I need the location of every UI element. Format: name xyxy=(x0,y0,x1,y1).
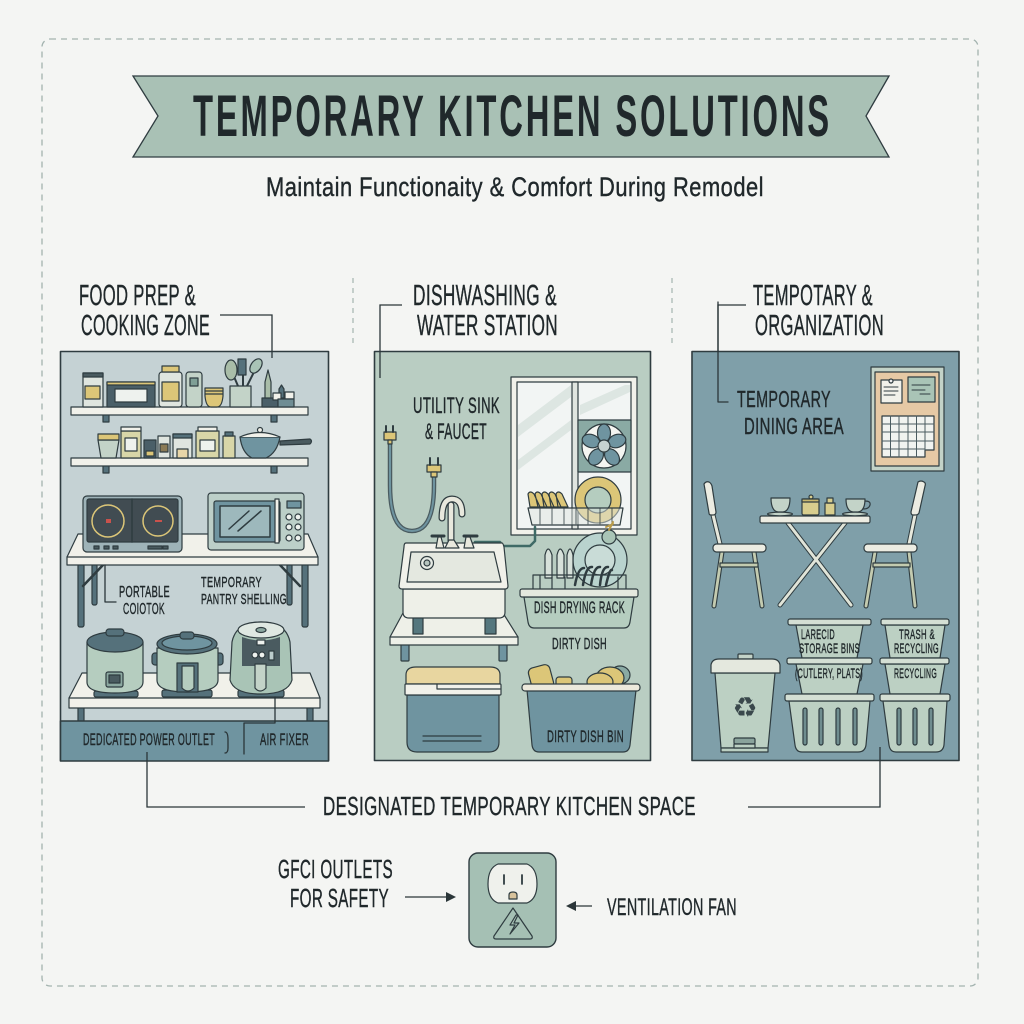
trash and recycling bins stack: TRASH & xyxy=(899,626,935,642)
corkboard with notes and calendar xyxy=(871,367,944,471)
bottom band: dedicated power outlet and air fryer: AIR FIXER xyxy=(260,730,309,749)
window rack with plates xyxy=(528,477,623,525)
label: temporary pantry shelling: PANTRY SHELLING xyxy=(201,591,287,608)
label: gfci outlets for safety: FOR SAFETY xyxy=(290,883,389,913)
connector: food prep heading xyxy=(220,315,272,358)
connector: dishwashing heading xyxy=(380,305,402,378)
label: temporary pantry shelling xyxy=(201,574,287,608)
heading: food prep: COOKING ZONE xyxy=(81,310,210,342)
heading: food prep: FOOD PREP & xyxy=(79,280,196,312)
arrow to outlet xyxy=(405,892,456,902)
storage bins stack: STORAGE BINS xyxy=(799,640,860,656)
heading: organization xyxy=(753,280,884,342)
trash and recycling bins stack xyxy=(880,619,950,752)
drain tube xyxy=(475,527,535,546)
panel: temporary dining and organization xyxy=(692,302,959,760)
callout: portable cooktop xyxy=(105,565,116,602)
subtitle: Maintain Functionaity & Comfort During Remodel xyxy=(266,172,764,202)
dish drying rack xyxy=(520,522,638,628)
portable cooktop xyxy=(83,496,182,552)
folding dining table xyxy=(760,516,870,605)
label: portable cooktop xyxy=(119,584,170,618)
heading: organization: TEMPOTARY & xyxy=(753,280,873,312)
cooler xyxy=(405,667,501,752)
utility sink with faucet xyxy=(390,499,518,661)
rice cooker xyxy=(87,629,143,697)
water hose with plugs xyxy=(384,426,441,531)
connector: organization heading top xyxy=(718,305,746,352)
trash and recycling bins stack: RECYCLING xyxy=(894,640,939,656)
shelf 1 with items xyxy=(71,357,308,422)
label: utility sink and faucet: & FAUCET xyxy=(425,419,487,444)
title banner xyxy=(133,76,889,157)
heading: dishwashing xyxy=(413,280,558,342)
label: gfci outlets for safety xyxy=(278,854,393,913)
label: portable cooktop: COIOTOK xyxy=(123,601,165,618)
right chair xyxy=(864,481,925,606)
label: designated temporary kitchen space: DESIGNATED TEMPORARY KITCHEN SPACE xyxy=(323,791,696,821)
label: portable cooktop: PORTABLE xyxy=(119,584,170,601)
label: ventilation fan: VENTILATION FAN xyxy=(607,894,737,921)
label: temporary pantry shelling: TEMPORARY xyxy=(201,574,262,591)
arrow from ventilation fan label xyxy=(566,901,592,911)
window with ventilation fan xyxy=(511,377,637,535)
bottom band: dedicated power outlet and air fryer xyxy=(60,697,328,761)
icon: gfci outlet xyxy=(469,853,556,947)
left chair xyxy=(704,482,766,606)
label: dirty dish: DIRTY DISH xyxy=(552,636,607,653)
bottom band: dedicated power outlet and air fryer: DEDICATED POWER OUTLET xyxy=(83,730,215,749)
panel: dishwashing and water station xyxy=(374,352,650,760)
heading: food prep xyxy=(79,280,210,342)
trash and recycling bins stack: RECYCLING xyxy=(894,665,937,681)
lower table xyxy=(69,673,320,722)
label: utility sink and faucet xyxy=(413,393,500,444)
heading: organization: ORGANIZATION xyxy=(755,310,884,342)
shelf 2 with items xyxy=(71,427,312,473)
dirty dish bin xyxy=(522,664,640,752)
dirty dish bin: DIRTY DISH BIN xyxy=(547,727,624,746)
callout: dining area xyxy=(718,302,728,402)
storage bins stack: (CUTLERY, PLATS) xyxy=(795,665,863,681)
slow cooker xyxy=(152,632,223,697)
microwave xyxy=(208,493,304,550)
trash can with recycling symbol: ♻ xyxy=(732,691,758,724)
label: gfci outlets for safety: GFCI OUTLETS xyxy=(278,854,393,884)
panel: food prep and cooking zone xyxy=(60,352,328,761)
label: temporary dining area: DINING AREA xyxy=(744,413,844,439)
air fryer xyxy=(230,622,292,697)
folding table xyxy=(67,534,318,627)
label: utility sink and faucet: UTILITY SINK xyxy=(413,393,500,418)
label: temporary dining area: TEMPORARY xyxy=(737,386,831,412)
heading: dishwashing: DISHWASHING & xyxy=(413,280,557,312)
storage bins stack xyxy=(785,619,874,752)
tableware xyxy=(768,495,870,516)
heading: dishwashing: WATER STATION xyxy=(417,310,558,342)
storage bins stack: LARECID xyxy=(801,626,835,642)
label: designated temporary kitchen space xyxy=(147,747,880,821)
trash can with recycling symbol xyxy=(711,654,780,752)
dish drying rack: DISH DRYING RACK xyxy=(534,598,625,617)
label: temporary dining area xyxy=(737,386,844,439)
